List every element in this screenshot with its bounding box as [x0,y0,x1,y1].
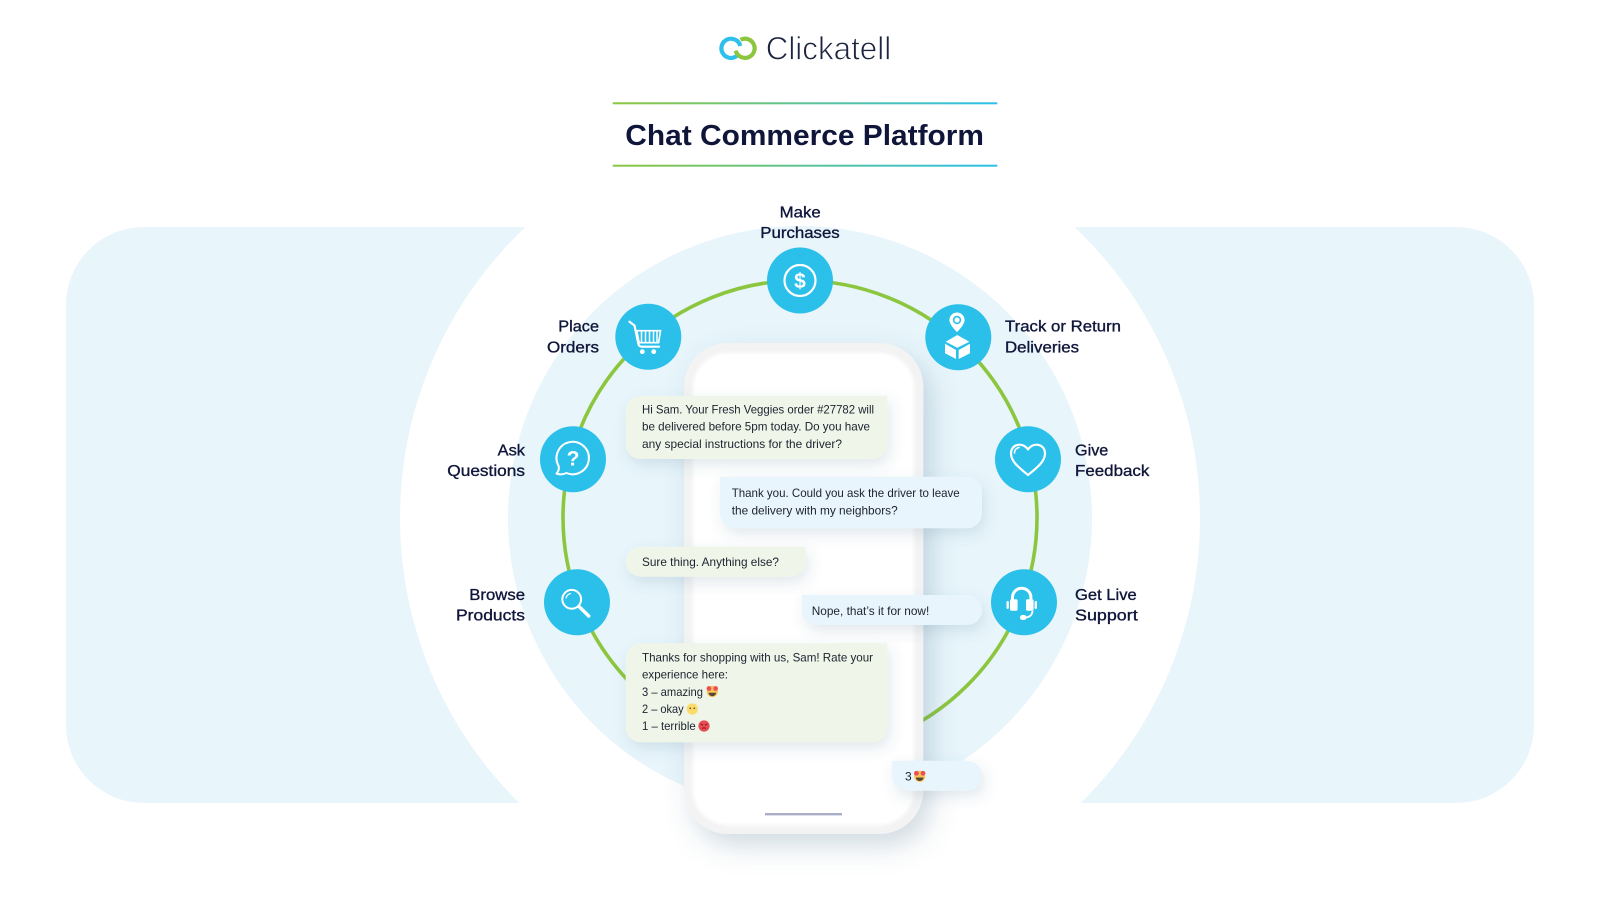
icon: heart [1011,445,1045,475]
icon: question bubble: ? [567,448,579,470]
chat bubble 1 [626,396,887,459]
label: Browse Products: Browse [469,587,525,604]
label: Place Orders: Orders [547,339,599,356]
chat bubble 6: 3 [905,770,912,784]
chat bubble 5: 3 – amazing [642,685,703,699]
logo: Clickatell [721,30,891,66]
icon: magnifier [562,590,589,616]
chat bubble 4 [802,595,982,625]
background panel [66,118,1534,900]
chat bubble 5 [626,643,887,742]
node: Ask Questions [447,426,606,492]
chat bubble 1: be delivered before 5pm today. Do you have [642,420,870,434]
chat bubble 4: Nope, that’s it for now! [812,604,929,618]
chat bubble 5: Thanks for shopping with us, Sam! Rate your [642,650,873,664]
label: Place Orders: Place [558,319,599,336]
label: Get Live Support: Support [1075,608,1138,625]
chat bubble 5: 2 – okay [642,702,684,716]
icon: linked rings [721,39,755,58]
chat bubble 1: Hi Sam. Your Fresh Veggies order #27782 will [642,402,874,416]
phone [684,343,923,834]
label: Browse Products: Products [456,608,525,625]
node: Place Orders [547,304,681,370]
chat bubble 6 [892,761,982,791]
chat bubble 5: experience here: [642,668,728,682]
label: Give Feedback: Give [1075,443,1108,460]
label: Ask Questions: Ask [498,443,526,460]
green ring connector [563,280,1037,754]
icon: headset [1006,588,1037,620]
label: Make Purchases: Purchases [760,225,840,242]
chat bubble 3 [626,547,806,577]
chat bubble 2: Thank you. Could you ask the driver to leave [732,486,960,500]
label: Track or Return Deliveries: Track or Return [1005,319,1121,336]
icon: pin and box [945,312,970,359]
chat bubble 2: the delivery with my neighbors? [732,503,898,517]
label: Ask Questions: Questions [447,463,525,480]
node: Browse Products [456,569,610,635]
chat bubble 3: Sure thing. Anything else? [642,555,779,569]
phone home bar [765,813,842,815]
node: Track or Return Deliveries [925,304,1121,370]
emoji: neutral [687,703,698,715]
emoji: heart eyes reply [914,771,925,782]
chat bubble 1: any special instructions for the driver? [642,437,842,451]
title: Chat Commerce Platform [625,120,984,152]
node: Get Live Support [991,569,1138,635]
icon: question bubble [556,442,589,474]
label: Track or Return Deliveries: Deliveries [1005,339,1079,356]
wordmark: Clickatell [766,30,891,66]
label: Make Purchases: Make [780,204,821,221]
label: Give Feedback: Feedback [1075,463,1150,480]
emoji: heart eyes [707,686,718,697]
emoji: angry [698,720,710,732]
node: Give Feedback [995,426,1150,492]
chat bubble 5: 1 – terrible [642,719,696,733]
node: Make Purchases [760,204,840,314]
chat bubble 2 [720,477,982,528]
label: Get Live Support: Get Live [1075,587,1137,604]
icon: dollar: $ [794,270,806,293]
icon: cart [630,322,660,354]
